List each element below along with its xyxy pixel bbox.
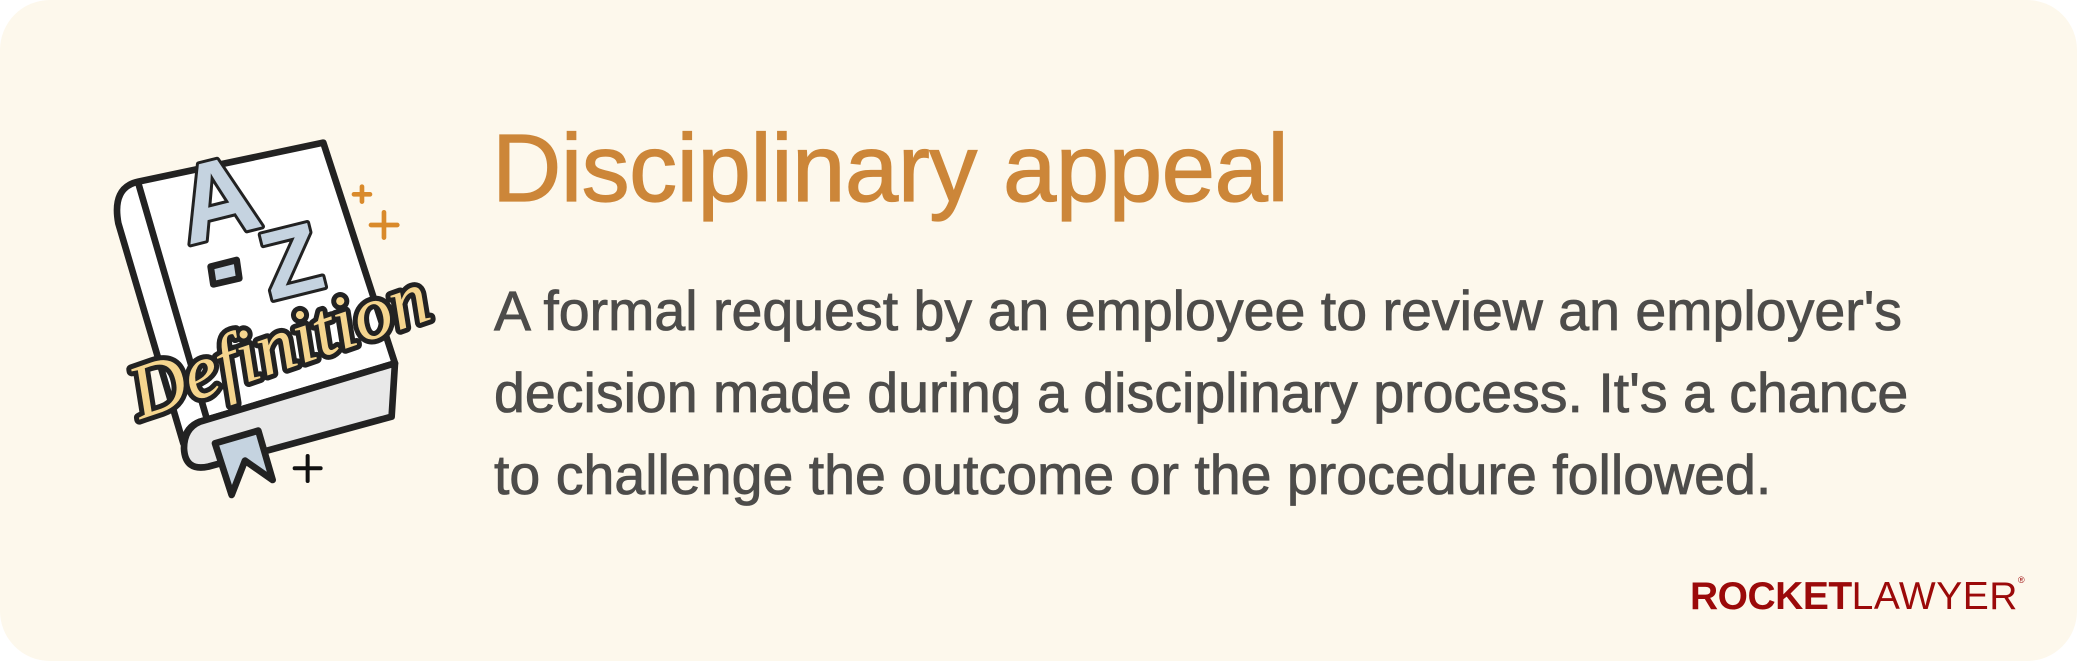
icon: A-Z definition book: Definition [117, 254, 440, 436]
logo: Rocket Lawyer: ROCKETLAWYER® [1690, 575, 2025, 618]
definition text [494, 280, 1908, 506]
title: Disciplinary appeal [492, 115, 1288, 222]
definition text: decision made during a disciplinary process. It's a chance [494, 362, 1908, 424]
icon: A-Z definition book [114, 130, 440, 498]
icon: A-Z definition book: A [164, 130, 271, 268]
icon: A-Z definition book: Z [250, 203, 333, 321]
definition text: to challenge the outcome or the procedure followed. [494, 444, 1771, 506]
definition text: A formal request by an employee to review an employer's [494, 280, 1902, 342]
